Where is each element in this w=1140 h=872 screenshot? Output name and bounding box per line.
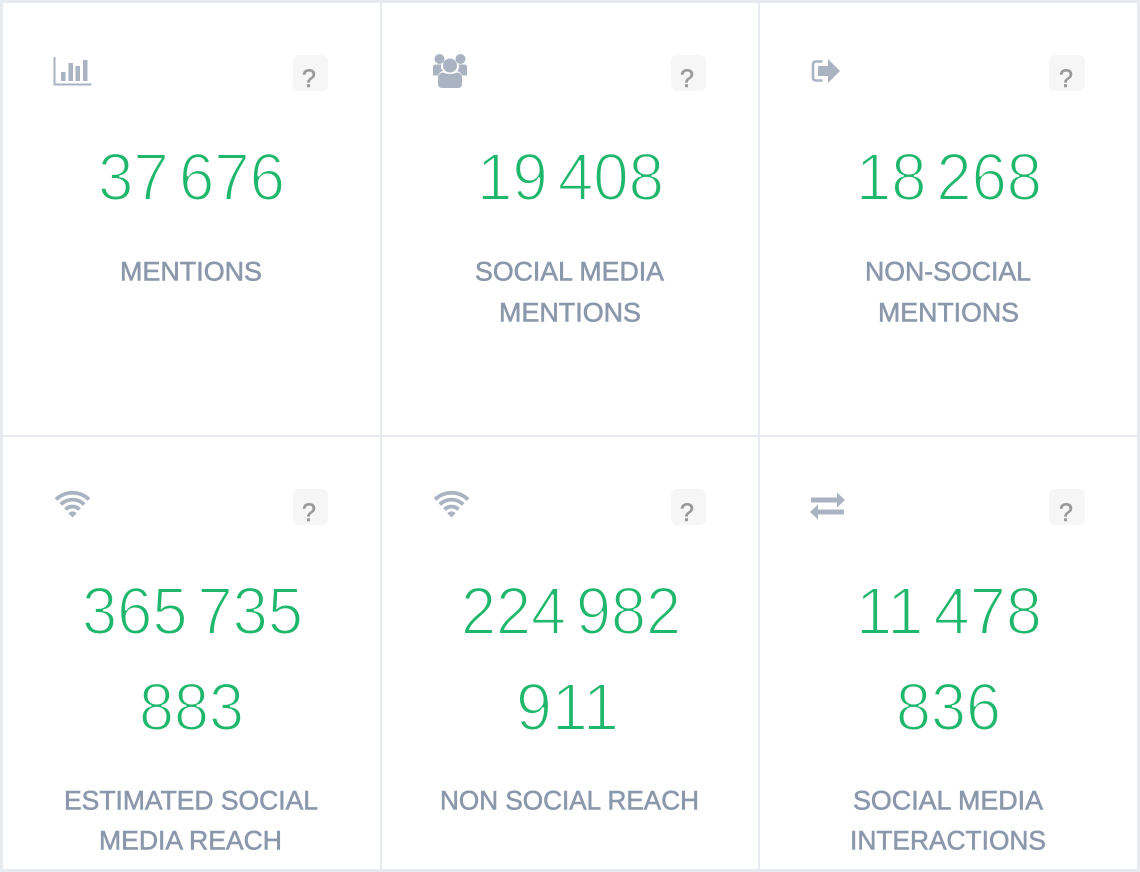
- panel: social media mentions: [433, 54, 706, 328]
- panel: mentions: [54, 55, 328, 286]
- metric label: ESTIMATED SOCIAL: [64, 786, 318, 816]
- metric label: MEDIA REACH: [99, 826, 282, 856]
- metric value: [82, 574, 303, 745]
- help button: [1049, 489, 1085, 527]
- metric value: 365 735: [82, 574, 303, 649]
- help button: [293, 55, 328, 93]
- metric label: SOCIAL MEDIA: [853, 786, 1043, 816]
- metric value: 18 268: [856, 140, 1042, 215]
- metric label: NON-SOCIAL: [865, 256, 1031, 286]
- metric value: 19 408: [477, 140, 664, 215]
- icon: bar chart: [54, 57, 92, 84]
- metric label: SOCIAL MEDIA: [475, 256, 664, 286]
- help button: ?: [302, 499, 316, 527]
- icon: exit arrow: [813, 59, 840, 83]
- metric label: [64, 786, 318, 856]
- icon: wifi: [56, 493, 89, 518]
- metric value: 836: [896, 670, 1001, 745]
- help button: [1049, 55, 1085, 93]
- panel: social media interactions: [810, 489, 1085, 856]
- metric value: 37 676: [98, 140, 285, 215]
- metric value: 224 982: [461, 574, 681, 649]
- metric value: 911: [516, 670, 619, 745]
- metric value: 11 478: [856, 574, 1042, 649]
- panel: non-social mentions: [813, 55, 1085, 328]
- panel: estimated social media reach: [56, 489, 328, 856]
- metric label: MENTIONS: [878, 298, 1019, 328]
- help button: [671, 489, 706, 527]
- icon: people: [433, 54, 467, 88]
- icon: transfer arrows: [810, 492, 845, 520]
- metric label: [865, 256, 1031, 328]
- icon: wifi: [435, 493, 468, 518]
- help button: ?: [680, 499, 694, 527]
- metric label: [475, 256, 664, 328]
- metric label: NON SOCIAL REACH: [440, 786, 699, 816]
- help button: [293, 489, 328, 527]
- metric value: [856, 574, 1042, 745]
- metric label: [850, 786, 1046, 856]
- help button: ?: [680, 65, 694, 93]
- metric value: [461, 574, 681, 745]
- metric value: 883: [139, 670, 244, 745]
- metric label: INTERACTIONS: [850, 826, 1046, 856]
- panel: non social reach: [435, 489, 706, 816]
- help button: ?: [302, 65, 316, 93]
- help button: ?: [1059, 499, 1073, 527]
- metric label: MENTIONS: [499, 298, 641, 328]
- help button: [671, 55, 706, 93]
- help button: ?: [1059, 65, 1073, 93]
- metric label: MENTIONS: [120, 256, 262, 286]
